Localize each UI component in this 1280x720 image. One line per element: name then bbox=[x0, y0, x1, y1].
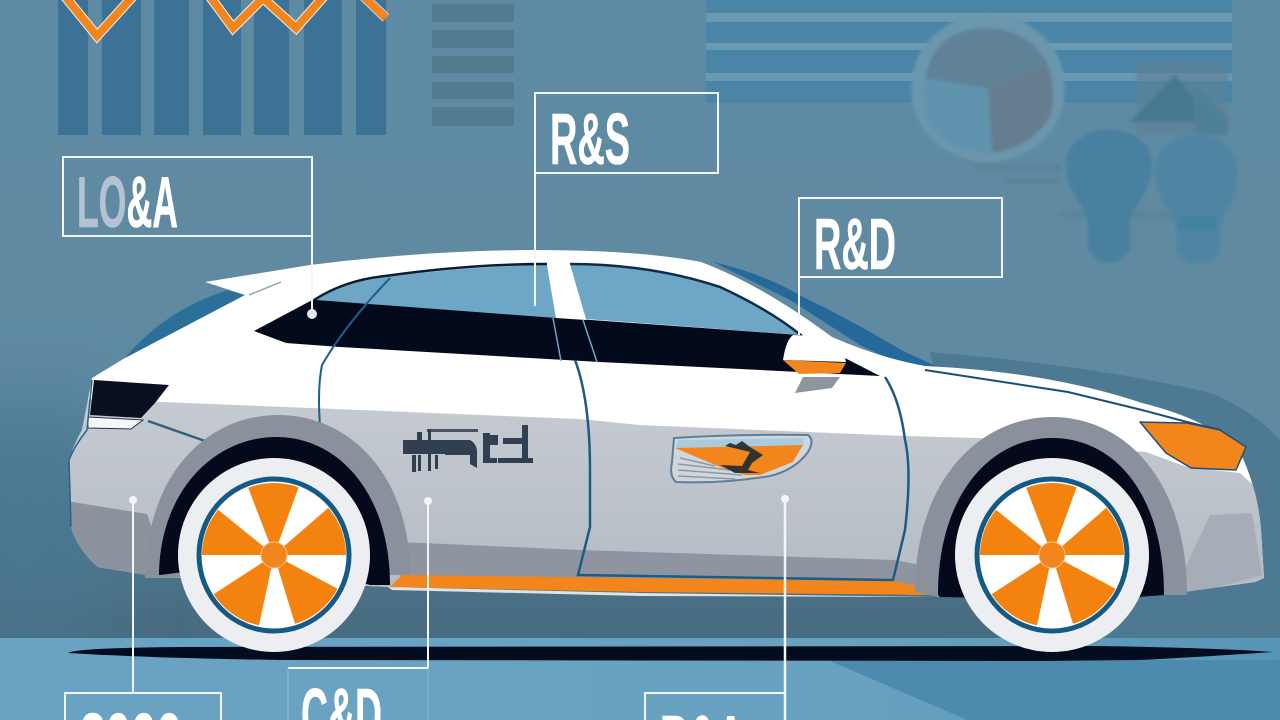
car bbox=[60, 250, 1270, 600]
background list blocks bbox=[432, 4, 514, 126]
hood edge stripe bbox=[713, 262, 940, 374]
rear wheel arch bbox=[145, 415, 410, 585]
tail light bbox=[88, 380, 205, 441]
rear body outline bbox=[69, 380, 92, 527]
label text: R&D bbox=[814, 205, 896, 285]
callout: 8000 bbox=[65, 496, 221, 720]
rear wheel bbox=[178, 458, 370, 652]
background light bulbs bbox=[1066, 130, 1238, 264]
background stripes panel bbox=[706, 0, 1232, 103]
background bar chart bbox=[58, 0, 386, 135]
lower body panel bbox=[60, 398, 1270, 600]
background pie chart bbox=[911, 14, 1065, 162]
ground shadow bbox=[68, 646, 1273, 661]
headlight bbox=[1140, 422, 1246, 470]
label text: LO&A bbox=[77, 163, 178, 243]
front wheel bbox=[955, 458, 1149, 652]
door emblem bbox=[403, 425, 533, 472]
callout: R&A bbox=[645, 495, 789, 720]
side badge bbox=[671, 435, 812, 482]
hood shadow bbox=[930, 352, 1280, 640]
front wheel arch bbox=[915, 417, 1187, 600]
callout: LO&A bbox=[63, 157, 317, 319]
door lines bbox=[319, 278, 390, 447]
floor bbox=[0, 638, 1280, 720]
hood line bbox=[925, 370, 1220, 430]
callout: R&D bbox=[799, 198, 1002, 335]
rear glass strip bbox=[125, 290, 247, 358]
side windows bbox=[254, 264, 880, 376]
background house icon bbox=[1130, 60, 1228, 135]
callout: C&D bbox=[288, 497, 432, 720]
background faint caption marks bbox=[975, 165, 1180, 217]
callout: R&S bbox=[535, 93, 718, 306]
label text: R&S bbox=[550, 100, 630, 180]
mirror bbox=[783, 335, 846, 393]
spoiler crease bbox=[249, 282, 281, 295]
car body bbox=[69, 250, 1264, 595]
sill stripe bbox=[390, 575, 938, 595]
